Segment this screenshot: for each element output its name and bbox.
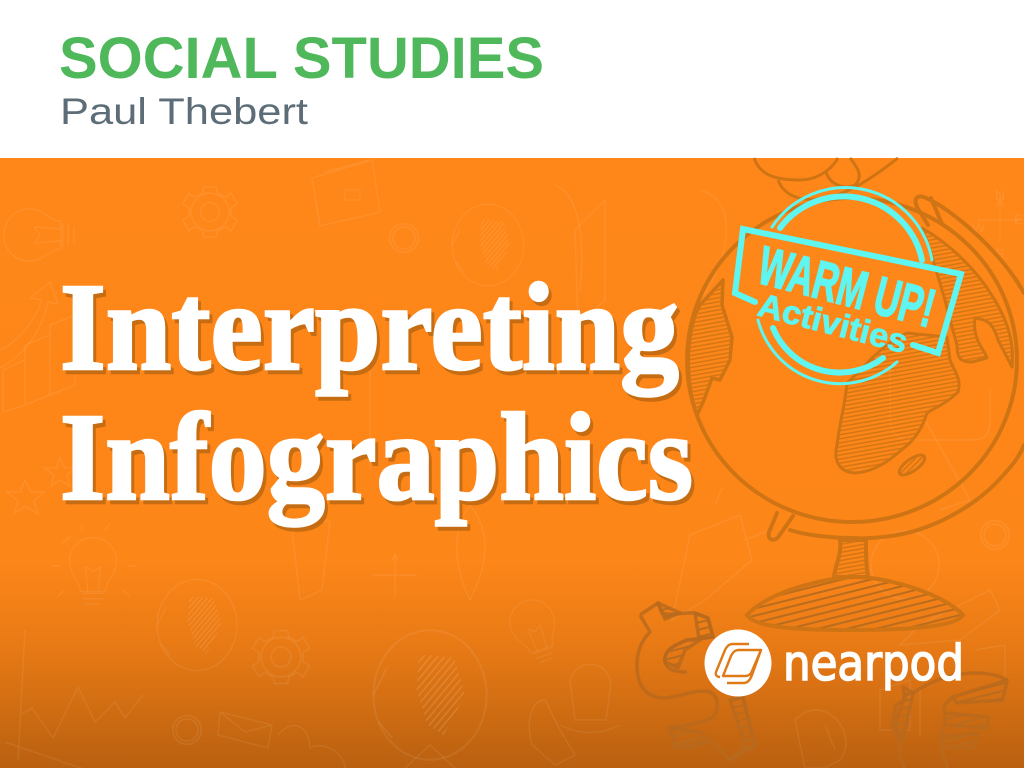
background doodle pattern: N	[995, 187, 1005, 203]
island	[896, 451, 928, 479]
globe base	[747, 577, 963, 630]
stamp rectangle	[735, 229, 961, 353]
right continent	[922, 228, 1012, 367]
background doodle pattern: W	[972, 219, 986, 235]
stamp circle bottom arcs	[758, 320, 897, 384]
globe arm nub	[769, 513, 793, 540]
nearpod logo	[704, 630, 964, 696]
orange background panel	[0, 158, 1024, 768]
logo wordmark: nearpod	[783, 635, 964, 692]
warm up stamp	[735, 188, 961, 384]
dollar sign illustration	[637, 603, 755, 760]
background doodle pattern: S	[995, 245, 1004, 261]
Africa continent	[836, 333, 959, 473]
globe top pin	[917, 198, 942, 225]
author name: Paul Thebert	[60, 91, 309, 132]
globe arm	[790, 196, 1024, 538]
large globe illustration	[687, 196, 1024, 630]
globe sphere	[687, 198, 1017, 522]
cartoon shapes above globe	[754, 158, 898, 199]
title line 2: Infographics	[60, 389, 693, 527]
background doodle pattern: E	[1014, 211, 1023, 227]
subject heading: SOCIAL STUDIES	[59, 26, 544, 91]
title line 1: Interpreting	[60, 259, 679, 397]
left continent	[688, 280, 732, 415]
stamp subheading: Activities	[754, 286, 912, 360]
main title	[60, 259, 693, 527]
logo icon	[704, 630, 772, 696]
background doodle pattern	[0, 160, 1023, 768]
euro sign illustration	[892, 673, 1007, 768]
header band	[0, 0, 1024, 158]
stamp circle top arcs	[772, 188, 932, 260]
globe neck	[834, 540, 868, 577]
